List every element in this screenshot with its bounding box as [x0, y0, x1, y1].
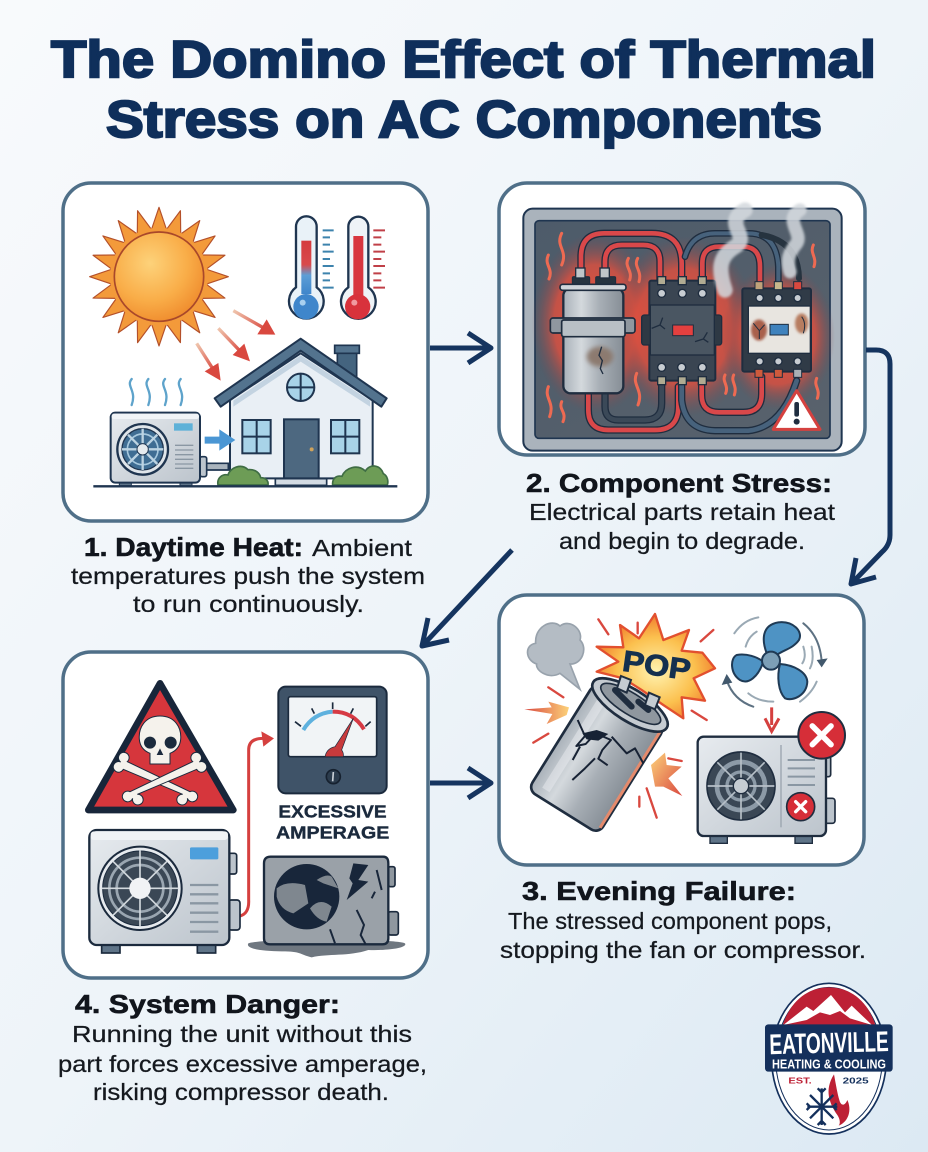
icon: white contactor	[742, 282, 811, 377]
ground line	[93, 483, 397, 490]
icon: cool thermometer	[289, 216, 334, 319]
logo established date: 2025	[843, 1075, 869, 1085]
icon: danger triangle with skull	[88, 683, 233, 810]
icon: heat waves	[130, 379, 182, 405]
logo established date: EST.	[788, 1075, 812, 1085]
logo snowflake	[807, 1088, 837, 1125]
text: step 2	[526, 468, 836, 554]
fan direction arrowheads	[722, 658, 828, 685]
panel 3: evening failure illustration	[499, 595, 864, 865]
text: step 1: 1. Daytime Heat:	[84, 532, 303, 562]
text: step 2: and begin to degrade.	[559, 528, 805, 554]
logo established date	[788, 1075, 869, 1085]
label: excessive amperage	[276, 801, 389, 843]
logo red dome with mountains	[783, 987, 875, 1025]
logo band	[765, 1024, 893, 1072]
icon: fan	[732, 622, 807, 699]
label: excessive amperage: AMPERAGE	[276, 823, 389, 843]
text: step 2: 2. Component Stress:	[526, 468, 832, 498]
arrow: step 2 to step 4	[422, 550, 512, 646]
icon: sun	[90, 207, 228, 346]
text: step 4	[58, 989, 427, 1105]
text: step 4: risking compressor death.	[93, 1079, 389, 1105]
icon: warning triangle	[773, 391, 820, 429]
icon: cracked capacitor	[526, 668, 675, 835]
text: step 4: Running the unit without this	[72, 1021, 412, 1047]
wires	[581, 233, 799, 431]
text: step 1: temperatures push the system	[71, 563, 425, 589]
title	[51, 31, 876, 149]
arrow: step 1 to step 2	[430, 333, 491, 363]
icon: smoke cloud	[528, 623, 584, 689]
label: excessive amperage: EXCESSIVE	[278, 801, 387, 821]
arrows: sun rays	[197, 311, 275, 381]
icon: smoke	[721, 210, 800, 290]
spark marks	[533, 619, 713, 818]
text: step 1	[71, 532, 425, 617]
logo flame	[829, 1074, 849, 1126]
icon: capacitor sparks	[524, 702, 682, 796]
text: step 4: part forces excessive amperage,	[58, 1051, 427, 1077]
icon: large red X	[798, 712, 845, 759]
logo band: HEATING & COOLING	[772, 1056, 886, 1071]
panel 4: system danger illustration	[63, 652, 428, 978]
icon: stopped AC unit	[698, 737, 835, 843]
arrow: red current line	[240, 738, 263, 916]
panel 2: component stress illustration	[499, 183, 865, 455]
icon: capacitor	[550, 268, 635, 393]
icon: running AC unit	[89, 830, 240, 953]
logo: Eatonville Heating & Cooling	[765, 983, 893, 1134]
icon: outdoor AC unit	[111, 413, 228, 486]
text: step 3: 3. Evening Failure:	[522, 876, 796, 906]
text: step 3: stopping the fan or compressor.	[500, 937, 866, 963]
text: step 2: Electrical parts retain heat	[529, 499, 836, 525]
text: step 1: Ambient	[312, 535, 413, 561]
icon: destroyed compressor	[248, 857, 405, 957]
icon: pop burst	[597, 614, 715, 718]
text: step 3: The stressed component pops,	[508, 908, 832, 934]
fan motion marks	[727, 617, 822, 707]
icon: house	[215, 339, 387, 485]
arrow: blue airflow	[205, 429, 235, 451]
icon: small red X	[787, 793, 815, 821]
panel 1: daytime heat illustration	[63, 183, 428, 521]
arrow: step 2 to step 3	[851, 350, 890, 584]
text: step 3	[500, 876, 866, 963]
title: The Domino Effect of Thermal	[51, 31, 876, 89]
text: step 1: to run continuously.	[133, 591, 364, 617]
arrow: step 4 to step 3	[430, 768, 491, 798]
title: Stress on AC Components	[106, 91, 822, 149]
icon: black contactor	[642, 277, 722, 385]
icon: amp meter	[278, 687, 387, 793]
icon: hot thermometer	[341, 217, 385, 319]
icon: bushes	[218, 466, 388, 485]
text: step 4: 4. System Danger:	[75, 989, 340, 1019]
electrical box	[523, 209, 842, 451]
icon: pop burst: POP	[620, 645, 693, 687]
arrow: red down	[765, 707, 779, 731]
icon: heat flames	[547, 233, 818, 422]
